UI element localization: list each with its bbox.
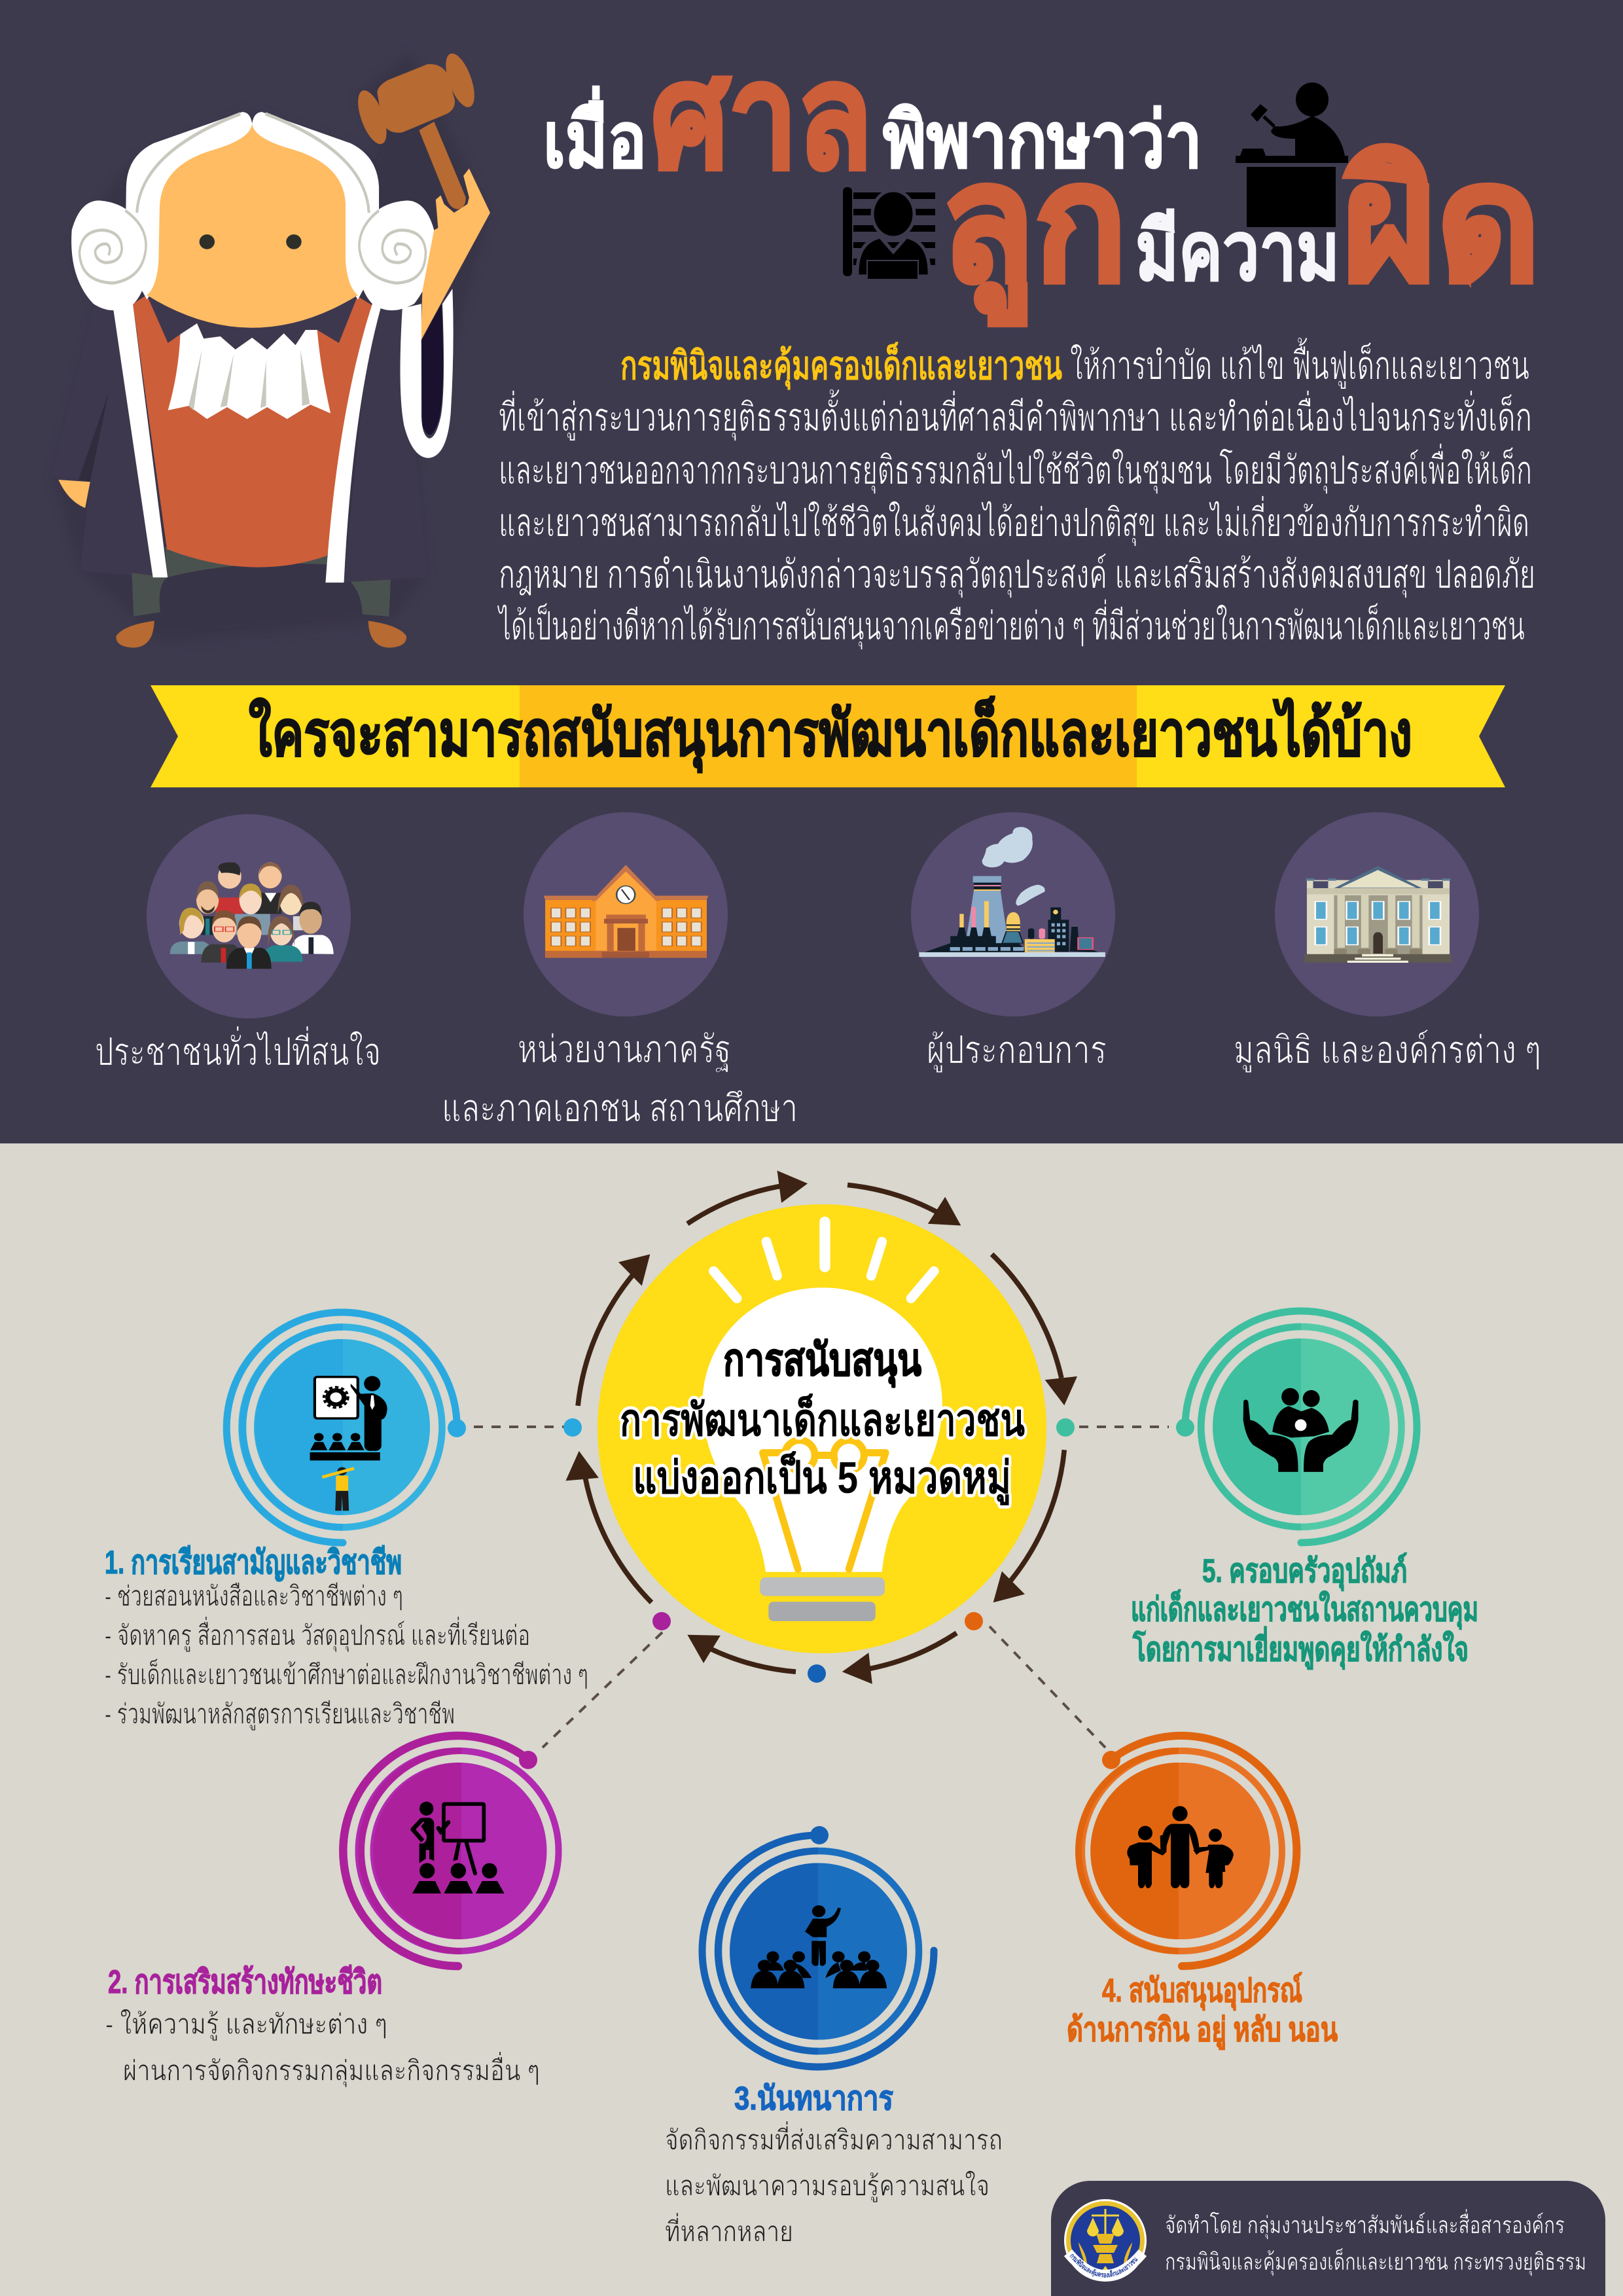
heading: item 4 [1067,1972,1338,2050]
banner: who can support [151,685,1505,787]
heading: item 1: 1. การเรียนสามัญและวิชาชีพ [105,1544,402,1581]
supporter: state agencies and schools [442,812,798,1130]
icon: department seal: กรมพินิจและคุ้มครองเด็กและเยาวชน [1069,2254,1138,2278]
title: first line: พิพากษาว่า [883,98,1202,184]
heading: item 4: ด้านการกิน อยู่ หลับ นอน [1067,2011,1338,2050]
supporter: foundations and organisations [1234,812,1541,1073]
illustration: judge with gavel [52,48,490,648]
title: first line: เมื่อ [543,86,647,184]
text block: intro paragraph: กรมพินิจและคุ้มครองเด็กและเยาวชน [620,342,1062,390]
list: item 2 details [105,2009,540,2088]
badge: item 3 [702,1826,934,2067]
list: item 3 details: จัดกิจกรรมที่ส่งเสริมความสามารถ [665,2121,1003,2155]
list: item 3 details: ที่หลากหลาย [665,2213,793,2247]
title: second line: มีความ [1135,206,1340,297]
text block: intro paragraph [497,337,1535,650]
icon: judge at podium [1236,82,1348,227]
heading: item 5 [1131,1552,1478,1670]
item 1: formal and vocational education [105,1312,588,1731]
badge: item 1 [226,1312,466,1543]
title: second line: ลูก [941,132,1127,325]
icon: group of people [170,862,334,969]
list: item 1 details: - ช่วยสอนหนังสือและวิชาชีพต่าง ๆ [105,1581,403,1611]
badge: item 4 [1079,1736,1296,1966]
heading: center title [620,1335,1025,1506]
list: item 1 details [105,1581,588,1731]
connectors: dashed links [474,1427,1169,1748]
item 3: recreation [665,1826,1003,2247]
supporter: general public [95,814,381,1073]
panel: dark upper section [0,0,1623,1143]
title: first line [543,36,1202,198]
list: item 3 details: และพัฒนาความรอบรู้ความสนใจ [665,2170,990,2202]
icon: convict mugshot [843,187,935,279]
heading: item 3: 3.นันทนาการ [734,2080,893,2117]
heading: item 4: 4. สนับสนุนอุปกรณ์ [1102,1972,1302,2011]
icon: teacher at board [412,1802,505,1893]
node dots on ring [563,1418,1075,1683]
heading: center title: การพัฒนาเด็กและเยาวชน [620,1393,1025,1445]
title: second line [941,132,1541,325]
item 4: equipment support [1067,1736,1338,2050]
heading: center title: การสนับสนุน [723,1335,921,1388]
supporter: business operators [911,812,1115,1073]
heading: item 5: 5. ครอบครัวอุปถัมภ์ [1202,1552,1407,1591]
list: item 2 details: ผ่านการจัดกิจกรรมกลุ่มและกิจกรรมอื่น ๆ [123,2052,540,2088]
item 2: life skills [105,1736,559,2088]
center: light bulb circle [597,1204,1046,1653]
list: item 2 details: - ให้ความรู้ และทักษะต่าง ๆ [105,2009,387,2041]
icon: instructor and worker [310,1376,387,1511]
label: state agencies: หน่วยงานภาครัฐ [518,1028,731,1072]
title: second line: ผิด [1343,132,1541,314]
item 5: foster family [1131,1311,1478,1670]
text: credits [1165,2209,1586,2276]
list: item 1 details: - รับเด็กและเยาวชนเข้าศึกษาต่อและฝึกงานวิชาชีพต่าง ๆ [105,1659,588,1690]
label: foundations and organisations: มูลนิธิ และองค์กรต่าง ๆ [1234,1029,1541,1073]
panel: credits footer [1051,2181,1605,2296]
icon: speaker and audience [751,1905,887,1988]
list: item 3 details [665,2121,1003,2247]
icon: adult and two children [1127,1806,1234,1888]
list: item 1 details: - จัดหาครู สื่อการสอน วัสดุอุปกรณ์ และที่เรียนต่อ [105,1617,530,1653]
heading: item 2: 2. การเสริมสร้างทักษะชีวิต [108,1964,382,2000]
icon: factory [919,827,1105,957]
badge: item 2 [343,1736,559,1966]
icon: neoclassical building [1304,866,1452,963]
title: first line: ศาล [651,36,872,198]
icon: department seal [1064,2199,1147,2282]
icon: hands holding family [1243,1388,1359,1472]
panel: light lower section [0,1143,1623,2296]
label: private sector and schools: และภาคเอกชน สถานศึกษา [442,1087,798,1130]
list: item 1 details: - ร่วมพัฒนาหลักสูตรการเรียนและวิชาชีพ [105,1698,455,1731]
icon: light bulb [702,1222,942,1621]
heading: item 5: โดยการมาเยี่ยมพูดคุยให้กำลังใจ [1132,1626,1469,1670]
heading: center title: แบ่งออกเป็น 5 หมวดหมู่ [633,1451,1011,1506]
label: general public: ประชาชนทั่วไปที่สนใจ [95,1026,381,1073]
badge: item 5 [1176,1311,1417,1543]
arrows: cycle ring around center [565,1171,1077,1684]
icon: school building [544,865,708,958]
heading: item 5: แก่เด็กและเยาวชนในสถานควบคุม [1131,1589,1478,1630]
label: business operators: ผู้ประกอบการ [927,1029,1107,1073]
